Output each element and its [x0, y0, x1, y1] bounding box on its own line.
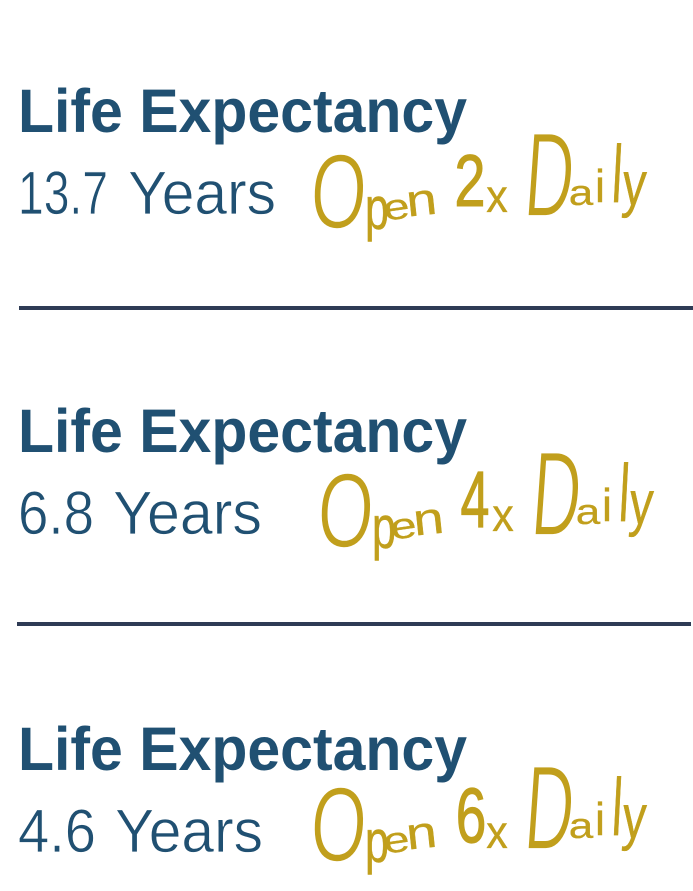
handwritten note: open 6x daily: n: [404, 806, 439, 859]
handwritten note: open 4x daily: O: [315, 452, 377, 570]
value: 4.6 years: [18, 797, 263, 865]
handwritten note: open 6x daily: D: [521, 741, 579, 875]
handwritten note: open 4x daily: l: [617, 448, 632, 538]
handwritten note: open 6x daily: e: [381, 818, 412, 861]
handwritten note: open 2x daily: y: [620, 149, 649, 219]
handwritten note: open 4x daily: x: [492, 491, 514, 541]
handwritten note: open 4x daily: i: [602, 480, 612, 531]
value: 6.8 years: 6.8: [18, 479, 94, 547]
handwritten note: open 2x daily: 2: [454, 140, 486, 222]
handwritten note: open 2x daily: a: [569, 173, 594, 213]
handwritten note: open 6x daily: [308, 741, 649, 884]
panel: 2x daily: [18, 77, 649, 251]
handwritten note: open 2x daily: D: [521, 108, 579, 242]
handwritten note: open 2x daily: n: [404, 173, 439, 226]
handwritten note: open 6x daily: i: [595, 794, 605, 845]
handwritten note: open 2x daily: x: [486, 172, 508, 222]
handwritten note: open 6x daily: l: [610, 762, 625, 852]
heading: life expectancy: Life Expectancy: [18, 715, 467, 783]
handwritten note: open 6x daily: O: [308, 766, 370, 884]
value: 6.8 years: [18, 479, 262, 547]
handwritten note: open 2x daily: l: [610, 129, 625, 219]
value: 13.7 years: 13.7: [18, 159, 108, 227]
value: 4.6 years: 4.6: [18, 797, 96, 865]
handwritten note: open 4x daily: 4: [461, 456, 489, 545]
panel: 6x daily: [18, 715, 649, 884]
handwritten note: open 4x daily: [315, 427, 656, 570]
value: 4.6 years: Years: [115, 797, 263, 865]
handwritten note: open 6x daily: x: [486, 808, 508, 858]
handwritten note: open 2x daily: i: [595, 161, 605, 212]
handwritten note: open 4x daily: e: [388, 504, 419, 547]
handwritten note: open 4x daily: y: [627, 468, 656, 538]
handwritten note: open 4x daily: p: [372, 495, 396, 562]
value: 13.7 years: [18, 159, 276, 227]
heading: life expectancy: Life Expectancy: [18, 397, 467, 465]
handwritten note: open 6x daily: a: [569, 806, 594, 846]
handwritten note: open 2x daily: O: [308, 133, 370, 251]
panel: 4x daily: [18, 397, 656, 570]
handwritten note: open 4x daily: D: [528, 427, 586, 561]
handwritten note: open 2x daily: e: [381, 185, 412, 228]
handwritten note: open 4x daily: a: [576, 492, 601, 532]
value: 6.8 years: Years: [113, 479, 262, 547]
handwritten note: open 2x daily: p: [365, 176, 389, 243]
handwritten note: open 6x daily: p: [365, 809, 389, 876]
handwritten note: open 6x daily: 6: [456, 773, 486, 859]
value: 13.7 years: Years: [128, 159, 276, 227]
handwritten note: open 4x daily: n: [411, 492, 446, 545]
heading: life expectancy: Life Expectancy: [18, 77, 467, 145]
handwritten note: open 2x daily: [308, 108, 649, 251]
handwritten note: open 6x daily: y: [620, 782, 649, 852]
